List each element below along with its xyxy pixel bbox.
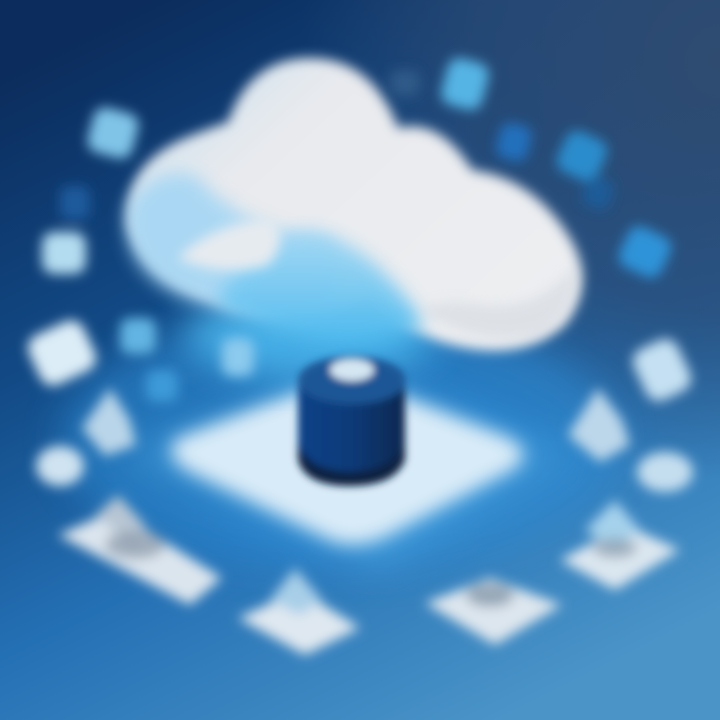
icon: left small pad: [36, 446, 84, 486]
icon: left white tile: [23, 316, 101, 390]
icon: inner left tile: [120, 318, 156, 354]
icon: laptop bottom centre-right: [425, 578, 562, 645]
cloud: [127, 58, 582, 377]
icon: laptop bottom centre-left: [238, 568, 360, 655]
icon: laptop lower left: [58, 495, 222, 605]
icon: right small pad: [637, 452, 693, 492]
devices right: [425, 388, 693, 645]
icon: right tile: [553, 127, 611, 185]
cloud inner blue scoop: [215, 231, 425, 342]
cloud left translucent lobe: [127, 173, 340, 314]
cloud right shading: [420, 265, 576, 339]
platform: diamond base: [120, 365, 570, 570]
icon: top right tile: [439, 55, 491, 113]
icon: laptop lower right: [560, 500, 680, 590]
icon: right white tile: [628, 334, 696, 406]
cloud underside glow: [185, 293, 435, 377]
floating tiles, left: [23, 105, 254, 402]
icon: left stacked device: [82, 388, 136, 456]
icon: right dark tile: [580, 174, 616, 212]
icon: inner pale tile: [222, 338, 254, 376]
devices left: [36, 388, 360, 655]
icon: far right tile: [615, 222, 675, 282]
icon: right tile small: [494, 120, 534, 164]
cloud inner white wisp: [178, 218, 280, 270]
cloud body: [127, 58, 582, 351]
icon: left dark tile: [60, 186, 90, 220]
floating tiles, top and right: [390, 55, 696, 406]
icon: top faint tile: [390, 70, 420, 96]
database cylinder: [298, 356, 406, 486]
icon: right stacked device: [568, 388, 630, 462]
icon: upper left tile: [85, 105, 141, 161]
icon: left pale tile: [42, 232, 86, 274]
icon: inner small tile: [146, 370, 178, 402]
